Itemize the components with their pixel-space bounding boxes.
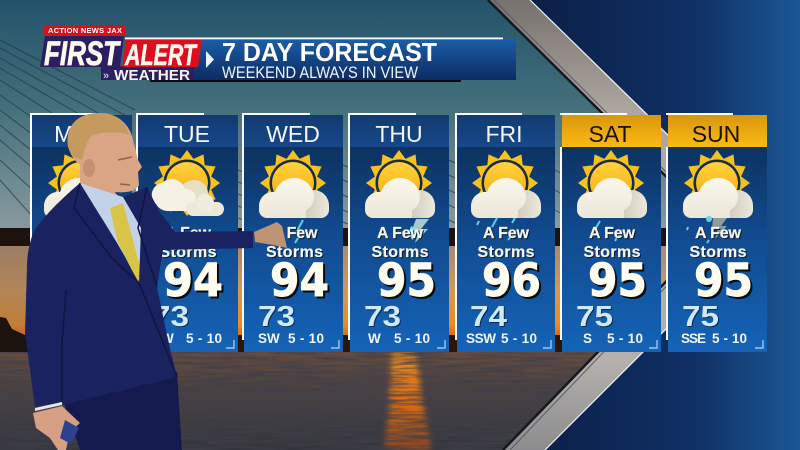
icon: sun, cloud and rain [471,150,541,240]
logo: First Alert Weather: FIRST [44,35,121,73]
panel: Thursday: 5 - 10 [394,331,430,346]
day label: TUE [164,121,210,147]
hair [68,113,129,160]
day label: THU [375,121,423,147]
panel: Thursday: Storms [372,244,429,261]
high temperature: 94 [270,254,329,307]
panel: Saturday: Storms [584,244,641,261]
subheading: WEEKEND ALWAYS IN VIEW [222,64,418,82]
title banner [40,25,516,84]
panel: Friday: Storms [478,244,535,261]
high temperature: 95 [377,254,436,307]
wind: W [368,331,381,346]
icon: sun with clouds [152,150,224,216]
high temperature: 95 [694,254,753,307]
hand holding clicker [33,406,80,450]
logo: First Alert Weather: ACTION NEWS JAX [48,26,122,35]
background: navy wall [530,0,800,450]
background: water with sun reflection [0,352,800,450]
logo: First Alert Weather: WEATHER [114,68,191,84]
day label: MON [54,121,108,147]
icon: arrow [206,51,214,68]
background: sky with bridge cables [0,0,800,240]
jacket folds [62,183,177,402]
icon: sun, cloud and storm [259,150,329,243]
day label: SUN [692,121,740,147]
low temperature: 74 [470,301,507,333]
conditions: A Few [377,225,424,242]
panel: Sunday: Storms [690,244,747,261]
panel: Tuesday: 5 - 10 [186,331,222,346]
presenter [25,113,287,450]
panel: Monday [31,114,132,352]
day label: WED [266,121,320,147]
icon: sun, cloud and rain [577,150,647,241]
conditions: A Few [272,225,318,242]
panel: Sunday: 5 - 10 [712,331,747,346]
low temperature: 75 [576,301,613,333]
high temperature: 96 [482,254,541,307]
conditions: A Few [483,225,530,242]
ear [83,159,95,177]
high temperature: 94 [163,254,223,307]
wind: SE [45,331,63,346]
shirt cuff [35,402,62,411]
panel: Sunday [667,114,767,352]
shirt [80,183,143,282]
wind: S [583,331,592,346]
icon: sun, cloud and lightning [683,150,753,243]
panel: Tuesday [137,114,238,352]
wind: SSE [681,331,706,346]
clicker [60,420,79,444]
logo: First Alert Weather [40,25,202,84]
panel: Wednesday: 5 - 10 [288,331,324,346]
logo: First Alert Weather: » [103,70,109,82]
heading: 7 DAY FORECAST [222,37,437,67]
panel: Friday [456,114,555,352]
low temperature: 75 [682,301,719,333]
panel: Tuesday: Storms [160,244,217,261]
conditions: A Few [589,225,636,242]
logo: First Alert Weather: ALERT [124,39,198,72]
wind: SSW [466,331,496,346]
neck and face [68,113,142,207]
high temperature: 95 [588,254,647,307]
panel: Saturday: 5 - 10 [607,331,643,346]
wind: SW [258,331,280,346]
low temperature: 73 [258,301,295,333]
background: diagonal metal strip [488,0,765,450]
panel: Wednesday: Storms [266,244,323,261]
icon: sun and cloud [44,150,114,218]
trousers [63,372,182,450]
day label: FRI [485,121,523,147]
panel: Saturday [561,114,661,352]
panel: Thursday [349,114,449,352]
panel: Friday: 5 - 10 [501,331,537,346]
wind: SW [152,331,174,346]
icon: sun, cloud and lightning [365,150,435,243]
day label: SAT [588,121,632,147]
pointing hand [254,222,287,248]
jacket [25,183,253,407]
conditions: A Few [165,225,212,242]
low temperature: 73 [364,301,401,333]
panel: Wednesday [243,114,343,352]
tie [110,203,141,283]
conditions: A Few [695,225,742,242]
low temperature: 73 [152,301,189,333]
background: sunset horizon [0,228,800,352]
